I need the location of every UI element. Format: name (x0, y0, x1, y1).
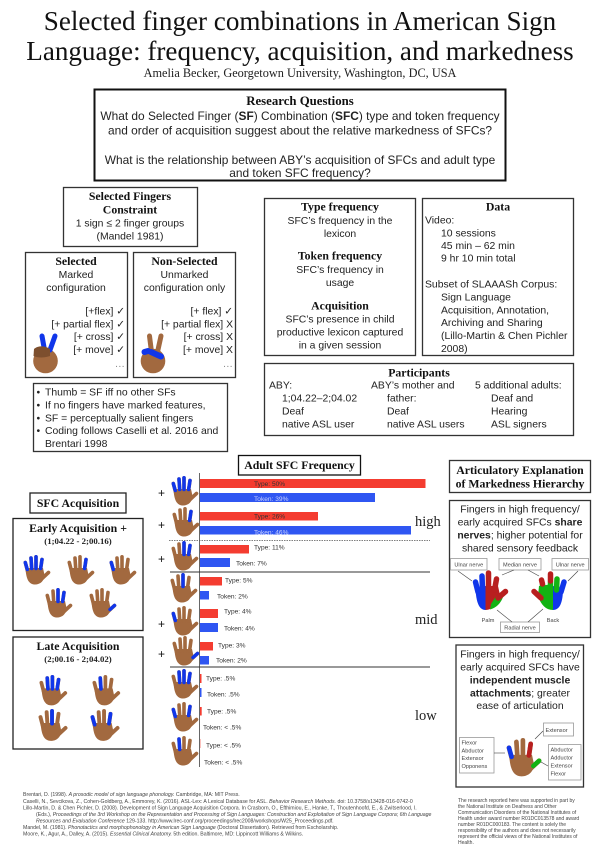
early-acquired markers: + (158, 647, 165, 661)
panel: research questions: Research Questions (246, 94, 354, 108)
panel: coding notes: • (36, 400, 40, 412)
funding note: Health. (458, 840, 474, 846)
panel: research questions: What is the relationship between ABY’s acquisition of SFCs and adult type (105, 153, 496, 167)
bars: row 6 (200, 642, 247, 664)
panel: participants: ABY: (269, 380, 292, 392)
icon: chart hand 4 (172, 575, 196, 602)
panel: definitions: Type frequency (301, 200, 379, 214)
icon: palm nerve hand (476, 573, 506, 610)
references: Brentari, D. (1998). A prosodic model of sign language phonology. Cambridge, MA: MIT Press. (23, 792, 240, 798)
panel: data: 9 hr 10 min total (441, 254, 516, 264)
panel: participants: Deaf (387, 406, 409, 418)
funding note: the National Institute on Deafness and Other (458, 804, 557, 810)
bars: row 3: Type: 11% (254, 544, 285, 552)
bars: row 2 (200, 512, 411, 536)
heading: articulatory explanation: Articulatory Explanation (456, 463, 584, 477)
panel: coding notes: • (36, 414, 40, 424)
heading: articulatory explanation: of Markedness Hierarchy (456, 476, 585, 490)
funding note: responsibility of the authors and does not necessarily (458, 828, 576, 834)
axis (198, 473, 200, 767)
funding note: represent the official views of the National Institutes of (458, 834, 578, 840)
label: ulnar nerve right (552, 558, 588, 570)
icon: hand pinky (111, 557, 134, 584)
icon: hand thumb (91, 590, 114, 618)
funding note: Communication Disorders of the National Institutes of (458, 810, 577, 816)
panel: definitions: lexicon (324, 229, 356, 240)
panel: data: 10 sessions (441, 228, 496, 240)
icon: back nerve hand (534, 574, 564, 610)
panel: early acquisition: Early Acquisition + (29, 521, 127, 535)
panel: shared nerves: early acquired SFCs share (458, 518, 583, 528)
panel: participants (264, 364, 574, 436)
funding note (458, 798, 579, 846)
panel: participants: Hearing (491, 406, 528, 418)
bars: row 2: Type: 26% (254, 514, 285, 520)
panel: selected: Marked (59, 270, 94, 281)
bars: row 6: Token: 2% (216, 658, 247, 664)
bars: row 1: Type: 50% (254, 481, 285, 488)
label: ulnar nerve left (450, 558, 487, 570)
panel: definitions: productive lexicon captured (277, 328, 403, 338)
bars: row 3 (200, 544, 285, 568)
panel: selected: [+ partial flex] ✓ (51, 320, 125, 330)
references: Moore, K., Agur, A., Dalley, A. (2015). Essential Clinical Anatomy. 5th edition. Baltimore, MD: Lippincott Williams & Wilkins. (23, 832, 303, 838)
icon: chart hand 2 (174, 509, 198, 536)
bars: row 5: Token: 4% (224, 626, 255, 632)
panel: non-selected: Unmarked (161, 270, 209, 281)
tier label: high: high (415, 514, 442, 530)
panel: participants: ABY’s mother and (371, 380, 455, 392)
icon: hand all four fingers (25, 557, 48, 584)
panel: selected: … (115, 359, 125, 370)
panel: selected: [+flex] ✓ (85, 306, 125, 318)
panel: definitions: Token frequency (298, 248, 382, 262)
panel: non-selected: [+ cross] X (184, 332, 233, 343)
title (26, 6, 574, 66)
label: ulnar nerve left: Ulnar nerve (454, 562, 483, 568)
label: pinky muscles: Flexor (462, 740, 477, 746)
panel: definitions: Acquisition (311, 298, 369, 312)
panel: research questions (94, 90, 506, 180)
bars: row 1: Token: 39% (254, 496, 289, 503)
panel: participants: 1;04.22–2;04.02 (282, 394, 357, 404)
funding note: number R01DC000183. The content is solely the (458, 822, 566, 828)
panel: selected: [+ move] ✓ (73, 345, 125, 356)
label: thumb muscles: Adductor (550, 756, 573, 762)
bars: row 2: Token: 46% (254, 530, 289, 536)
panel: muscle attachments: early acquired SFCs have (460, 662, 580, 674)
icon: hand middle and index (47, 590, 70, 618)
icon: selected hand (33, 336, 58, 373)
panel: muscle attachments: independent muscle (470, 676, 570, 686)
funding note: Health under award number R01DC013578 and award (458, 816, 579, 822)
bars: row 8 (200, 707, 241, 732)
early-acquired markers: + (158, 486, 165, 500)
icon: hand ring (94, 677, 118, 705)
bars: row 9: Type: < .5% (206, 742, 241, 750)
panel: shared nerves: Fingers in high frequency/ (460, 504, 580, 516)
label: thumb muscles (548, 744, 581, 780)
tier label: low: low (415, 708, 437, 724)
label: palm: Palm (482, 618, 495, 624)
bars: row 7: Token: .5% (207, 692, 240, 698)
icon: hand ring middle index (41, 677, 65, 705)
panel: coding notes: If no fingers have marked features, (45, 400, 206, 412)
panel: research questions: and token SFC frequency? (229, 166, 371, 180)
panel: selected: Selected (55, 254, 97, 268)
panel: participants: ASL signers (491, 420, 547, 430)
bars: row 4 (200, 577, 253, 600)
bars: row 7: Type: .5% (206, 676, 235, 682)
icon: chart hand 5 (173, 608, 196, 636)
bar chart: adult SFC frequency (158, 473, 442, 767)
panel: muscle attachments (456, 645, 584, 787)
panel: coding notes (34, 384, 228, 452)
panel: selected: configuration (46, 283, 106, 294)
panel: muscle attachments: ease of articulation (476, 701, 564, 712)
panel: non-selected: … (223, 359, 233, 370)
references: (Eds.), Proceedings of the 3rd Workshop on the Representation and Processing of Sign Languages: Construction and Exploitation of Sign Language Corpora; 6th Language (36, 812, 431, 818)
bars: row 9 (200, 739, 242, 766)
panel: data: Sign Language (441, 292, 511, 304)
icon: hand pinky and index (92, 711, 118, 741)
icon: chart hand 3 (173, 543, 196, 570)
panel: definitions: usage (326, 278, 354, 289)
icon: hand index (69, 557, 92, 584)
panel: participants: father: (387, 394, 416, 404)
bars: row 4: Type: 5% (225, 578, 253, 584)
arrows: nerve labels (458, 570, 578, 622)
panel: late acquisition: Late Acquisition (37, 639, 120, 653)
bars: row 8: Type: .5% (207, 708, 236, 716)
references: Lillo-Martin, D. & Chen Pichler, D. (2008). Development of Sign Language Acquisition Corpora. In Crasborn, O., Efthimiou, E., Hanke, T., Thoutenhoofd, E., & Zwitserlood, I. (23, 806, 417, 812)
panel: definitions: SFC’s frequency in the (288, 216, 393, 227)
panel: coding notes: SF = perceptually salient fingers (45, 414, 193, 424)
panel: data: Archiving and Sharing (441, 318, 543, 329)
references (23, 792, 431, 838)
bars: row 4: Token: 2% (217, 594, 248, 600)
panel: selected (26, 252, 128, 378)
heading: SFC acquisition (30, 493, 126, 513)
panel: selected fingers constraint: 1 sign ≤ 2 finger groups (76, 218, 184, 230)
bars: row 7 (200, 674, 240, 698)
panel: data: 2008) (441, 344, 468, 355)
label: back: Back (547, 618, 559, 624)
panel: early acquisition: (1;04.22 - 2;00.16) (44, 536, 112, 546)
panel: non-selected: configuration only (144, 283, 226, 294)
icon: chart hand 9 (173, 738, 196, 766)
label: thumb muscles: Abductor (550, 748, 573, 754)
panel: research questions: What do Selected Finger (SF) Combination (SFC) type and token frequency (100, 109, 500, 123)
bars: row 1 (200, 479, 426, 503)
panel: definitions: SFC’s presence in child (286, 314, 395, 326)
early-acquired markers: + (158, 617, 165, 631)
references: Resources and Evaluation Conference 129-133. http://www.lrec-conf.org/proceedings/lrec2008/workshops/W25_Proceedings.pdf. (36, 818, 334, 824)
panel: definitions: in a given session (299, 340, 382, 352)
label: pinky muscles (460, 738, 494, 773)
funding note: The research reported here was supported in part by (458, 798, 575, 804)
icon: muscle hand (509, 740, 539, 776)
panel: participants: Deaf (282, 406, 304, 418)
panel: selected fingers constraint: Constraint (103, 202, 157, 216)
heading: adult SFC frequency (238, 456, 360, 475)
author line: Amelia Becker, Georgetown University, Washington, DC, USA (144, 66, 457, 80)
panel: participants: native ASL user (282, 420, 355, 430)
panel: coding notes: • (36, 388, 40, 398)
early-acquired markers (158, 486, 165, 661)
panel: non-selected: [+ partial flex] X (161, 320, 233, 330)
panel: muscle attachments: Fingers in high frequency/ (460, 650, 580, 660)
panel: late acquisition: (2;00.16 - 2;04.02) (44, 654, 112, 664)
arrows: muscle labels (494, 731, 548, 766)
bars: row 3: Token: 7% (236, 560, 267, 568)
panel: selected: [+ cross] ✓ (74, 332, 125, 343)
panel: data (422, 198, 574, 356)
panel: data: 45 min – 62 min (441, 241, 515, 252)
heading: SFC acquisition: SFC Acquisition (37, 496, 120, 510)
panel: non-selected (134, 252, 236, 378)
label: pinky muscles: Extensor (462, 756, 484, 762)
panel: muscle attachments: attachments; greater (470, 688, 570, 700)
label: median nerve (499, 558, 541, 570)
panel: non-selected: [+ move] X (183, 345, 233, 356)
references: Caselli, N., Sevcikova, Z., Cohen-Goldberg, A., Emmorey, K. (2016). ASL-Lex: A Lexical Database for ASL. Behavior Research Methods. doi: 10.3758/s13428-016-0742-0 (23, 799, 413, 805)
panel: selected fingers constraint: Selected Fingers (89, 189, 172, 203)
label: extensor: Extensor (546, 728, 568, 734)
panel: definitions: SFC’s frequency in (296, 265, 384, 276)
label: pinky muscles: Abductor (462, 748, 484, 754)
references: Mandel, M. (1981). Phonotactics and morphophonology in American Sign Language (Doctoral Dissertation). Retrieved from Escholarship. (23, 825, 338, 831)
panel: data: (Lillo-Martin & Chen Pichler (441, 331, 568, 342)
heading: articulatory explanation (450, 460, 590, 492)
title: Language: frequency, acquisition, and markedness (26, 36, 574, 66)
early-acquired markers: + (158, 518, 165, 532)
bars: row 5 (200, 608, 255, 632)
panel: data: Video: (425, 216, 454, 226)
label: median nerve: Median nerve (503, 562, 537, 568)
label: pinky muscles: Opponens (462, 764, 488, 770)
panel: participants: Deaf and (491, 394, 533, 404)
icon: chart hand 7 (173, 671, 196, 698)
bars: row 5: Type: 4% (224, 608, 252, 616)
panel: coding notes: • (36, 426, 40, 437)
label: thumb muscles: Extensor (550, 764, 573, 770)
panel: data: Data (486, 200, 510, 214)
panel: participants: Participants (388, 366, 450, 380)
title: Selected finger combinations in American Sign (44, 6, 557, 36)
panel: participants: 5 additional adults: (475, 380, 562, 392)
bars: row 9: Token: < .5% (204, 760, 242, 766)
panel: shared nerves: shared sensory feedback (462, 544, 579, 554)
icon: chart hand 1 (173, 478, 196, 506)
panel: data: Subset of SLAAASh Corpus: (425, 280, 557, 290)
label: ulnar nerve right: Ulnar nerve (556, 562, 585, 568)
panel: non-selected: Non-Selected (151, 254, 218, 268)
panel: coding notes: Thumb = SF iff no other SFs (45, 388, 176, 398)
panel: selected fingers constraint: (Mandel 1981) (96, 232, 164, 242)
panel: definitions (264, 198, 416, 356)
label: radial nerve: Radial nerve (504, 626, 536, 632)
label: thumb muscles: Flexor (550, 772, 566, 778)
icon: hand middle (40, 711, 66, 741)
panel: selected fingers constraint (64, 188, 198, 246)
panel: research questions: and order of acquisition suggest about the relative markedness of SFCs? (108, 124, 492, 138)
panel: early acquisition (13, 518, 143, 630)
early-acquired markers: + (158, 552, 165, 566)
panel: shared nerves (450, 500, 590, 638)
panel: data: Acquisition, Annotation, (441, 306, 549, 316)
panel: shared nerves: nerves; higher potential for (457, 530, 583, 542)
tier label: mid: mid (415, 612, 438, 628)
label: extensor (544, 723, 574, 736)
panel: coding notes: Brentari 1998 (45, 439, 108, 450)
panel: late acquisition (13, 637, 143, 749)
icon: chart hand 6 (174, 638, 198, 666)
bars: row 8: Token: < .5% (203, 724, 241, 732)
panel: non-selected: [+ flex] ✓ (190, 306, 233, 318)
icon: chart hand 8 (173, 704, 196, 732)
label: radial nerve (500, 622, 540, 632)
panel: participants: native ASL users (387, 420, 465, 430)
heading: adult SFC frequency: Adult SFC Frequency (244, 458, 355, 472)
panel: coding notes: Coding follows Caselli et al. 2016 and (45, 426, 219, 437)
icon: non-selected hand (141, 336, 165, 373)
bars: row 6: Type: 3% (218, 642, 246, 650)
